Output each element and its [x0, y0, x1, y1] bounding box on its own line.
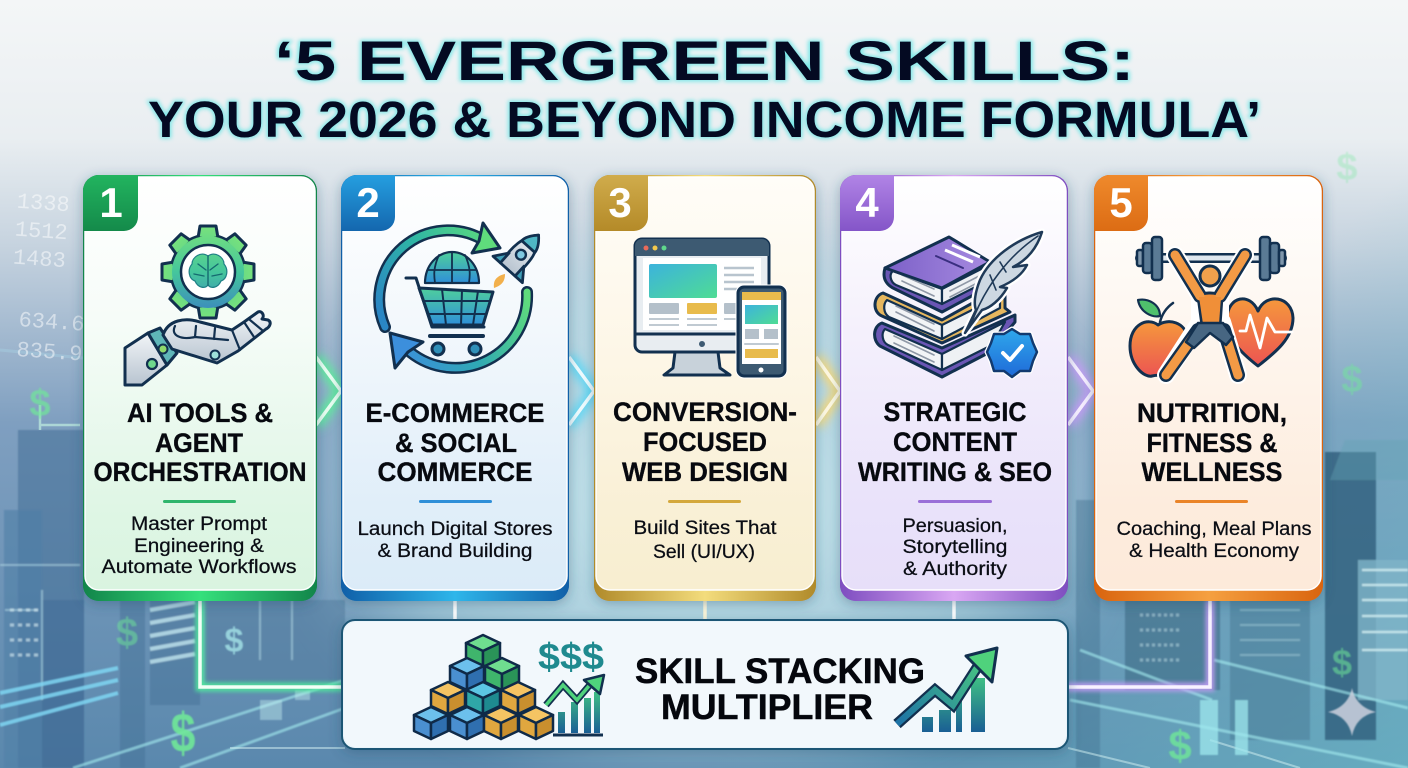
description: Master Prompt — [131, 514, 268, 535]
label: skill stacking multiplier: MULTIPLIER — [661, 688, 873, 727]
number badge 4 — [840, 175, 894, 231]
heading: WELLNESS — [1142, 457, 1282, 487]
number badge 1 — [83, 175, 138, 231]
icon: book stack, feather and verified badge — [875, 232, 1042, 377]
panel: skill 5 wellness — [1094, 175, 1323, 601]
icon: small growth chart — [546, 675, 604, 735]
number badge 2 — [341, 175, 395, 231]
heading: WEB DESIGN — [622, 457, 788, 487]
heading: NUTRITION, — [1137, 398, 1287, 428]
background: finance city scene: $ — [225, 622, 244, 660]
description — [1116, 519, 1312, 562]
description — [358, 519, 552, 562]
description: Storytelling — [902, 537, 1008, 558]
label: skill stacking multiplier: SKILL STACKING — [635, 652, 925, 691]
panel: skill stacking multiplier — [342, 620, 1068, 749]
background: finance city scene: 634.6 — [18, 308, 85, 338]
dollar signs: $$$ — [538, 636, 604, 677]
description — [902, 516, 1008, 580]
number badge 4: 4 — [855, 179, 879, 226]
heading — [94, 398, 306, 487]
description: Coaching, Meal Plans — [1116, 519, 1312, 540]
heading: STRATEGIC — [884, 397, 1026, 427]
background: finance city scene: 1338 .3 — [16, 190, 110, 221]
number badge 3: 3 — [608, 179, 632, 226]
background: finance city scene: $ — [1341, 359, 1363, 401]
number badge 1: 1 — [99, 179, 123, 226]
icon: sparkle watermark — [1328, 688, 1376, 736]
heading: FITNESS & — [1146, 428, 1278, 458]
background: finance city scene: $ — [116, 611, 138, 655]
arrow: card 3 to card 4 — [816, 357, 840, 425]
heading: WRITING & SEO — [858, 457, 1052, 487]
description — [102, 514, 296, 578]
heading: CONTENT — [893, 427, 1017, 457]
title: YOUR 2026 & BEYOND INCOME FORMULA’ — [148, 91, 1261, 148]
description: Build Sites That — [634, 518, 777, 539]
icon: shopping cart, globe, cycle arrows and rocket — [379, 222, 553, 368]
description: Sell (UI/UX) — [653, 542, 755, 563]
heading: & SOCIAL — [395, 428, 517, 458]
number badge 5: 5 — [1109, 179, 1133, 226]
label: skill stacking multiplier — [635, 652, 925, 727]
heading — [1137, 398, 1287, 487]
number badge 2: 2 — [356, 179, 380, 226]
description: Automate Workflows — [102, 557, 296, 578]
panel: skill 2 e-commerce — [341, 175, 569, 601]
heading — [858, 397, 1052, 487]
background: finance city scene: 835.9 — [16, 338, 83, 368]
background: finance city scene: $ — [29, 383, 51, 425]
heading: AI TOOLS & — [127, 398, 273, 428]
panel: skill 1 AI tools — [83, 175, 317, 601]
description: Launch Digital Stores — [358, 519, 552, 540]
background: finance city scene: 1483 .5 — [12, 246, 106, 277]
description — [634, 518, 777, 563]
arrow: card 2 to card 3 — [569, 357, 594, 425]
background: finance city scene: $ — [1336, 147, 1358, 189]
title — [148, 29, 1261, 148]
panel: skill 4 content writing — [840, 175, 1068, 601]
heading: ORCHESTRATION — [94, 457, 306, 487]
number badge 3 — [594, 175, 648, 231]
arrow: card 1 to card 2 — [316, 357, 341, 425]
description: & Health Economy — [1129, 541, 1300, 562]
background: finance city scene: 1512 .3 — [14, 218, 108, 249]
arrow: card 4 to card 5 — [1068, 357, 1093, 425]
heading: COMMERCE — [378, 457, 532, 487]
panel: skill 3 web design — [594, 175, 816, 601]
description: & Brand Building — [378, 541, 532, 562]
icon: gear with brain above robot hand — [125, 226, 270, 385]
background: finance city scene: $ — [170, 701, 196, 764]
heading: CONVERSION- — [613, 397, 797, 427]
icon: barbell athlete, apple and heart — [1130, 237, 1293, 376]
number badge 5 — [1094, 175, 1148, 231]
heading — [613, 397, 797, 487]
title: ‘5 EVERGREEN SKILLS: — [274, 29, 1135, 92]
background: finance city scene: $ — [1332, 642, 1352, 683]
icon: stacked skill cubes — [414, 635, 553, 739]
heading: AGENT — [155, 428, 243, 458]
description: & Authority — [903, 559, 1008, 580]
heading: FOCUSED — [643, 427, 767, 457]
icon: large growth arrow — [897, 648, 997, 732]
heading — [366, 398, 544, 487]
connectors from cards to multiplier panel — [200, 600, 1210, 687]
background: finance city scene: $ — [1168, 722, 1192, 768]
description: Persuasion, — [902, 516, 1008, 537]
icon: desktop monitor and phone — [635, 239, 785, 376]
heading: E-COMMERCE — [366, 398, 544, 428]
title: YOUR 2026 & BEYOND INCOME FORMULA’ — [148, 91, 1261, 148]
description: Engineering & — [134, 536, 264, 557]
title: ‘5 EVERGREEN SKILLS: — [274, 29, 1135, 92]
